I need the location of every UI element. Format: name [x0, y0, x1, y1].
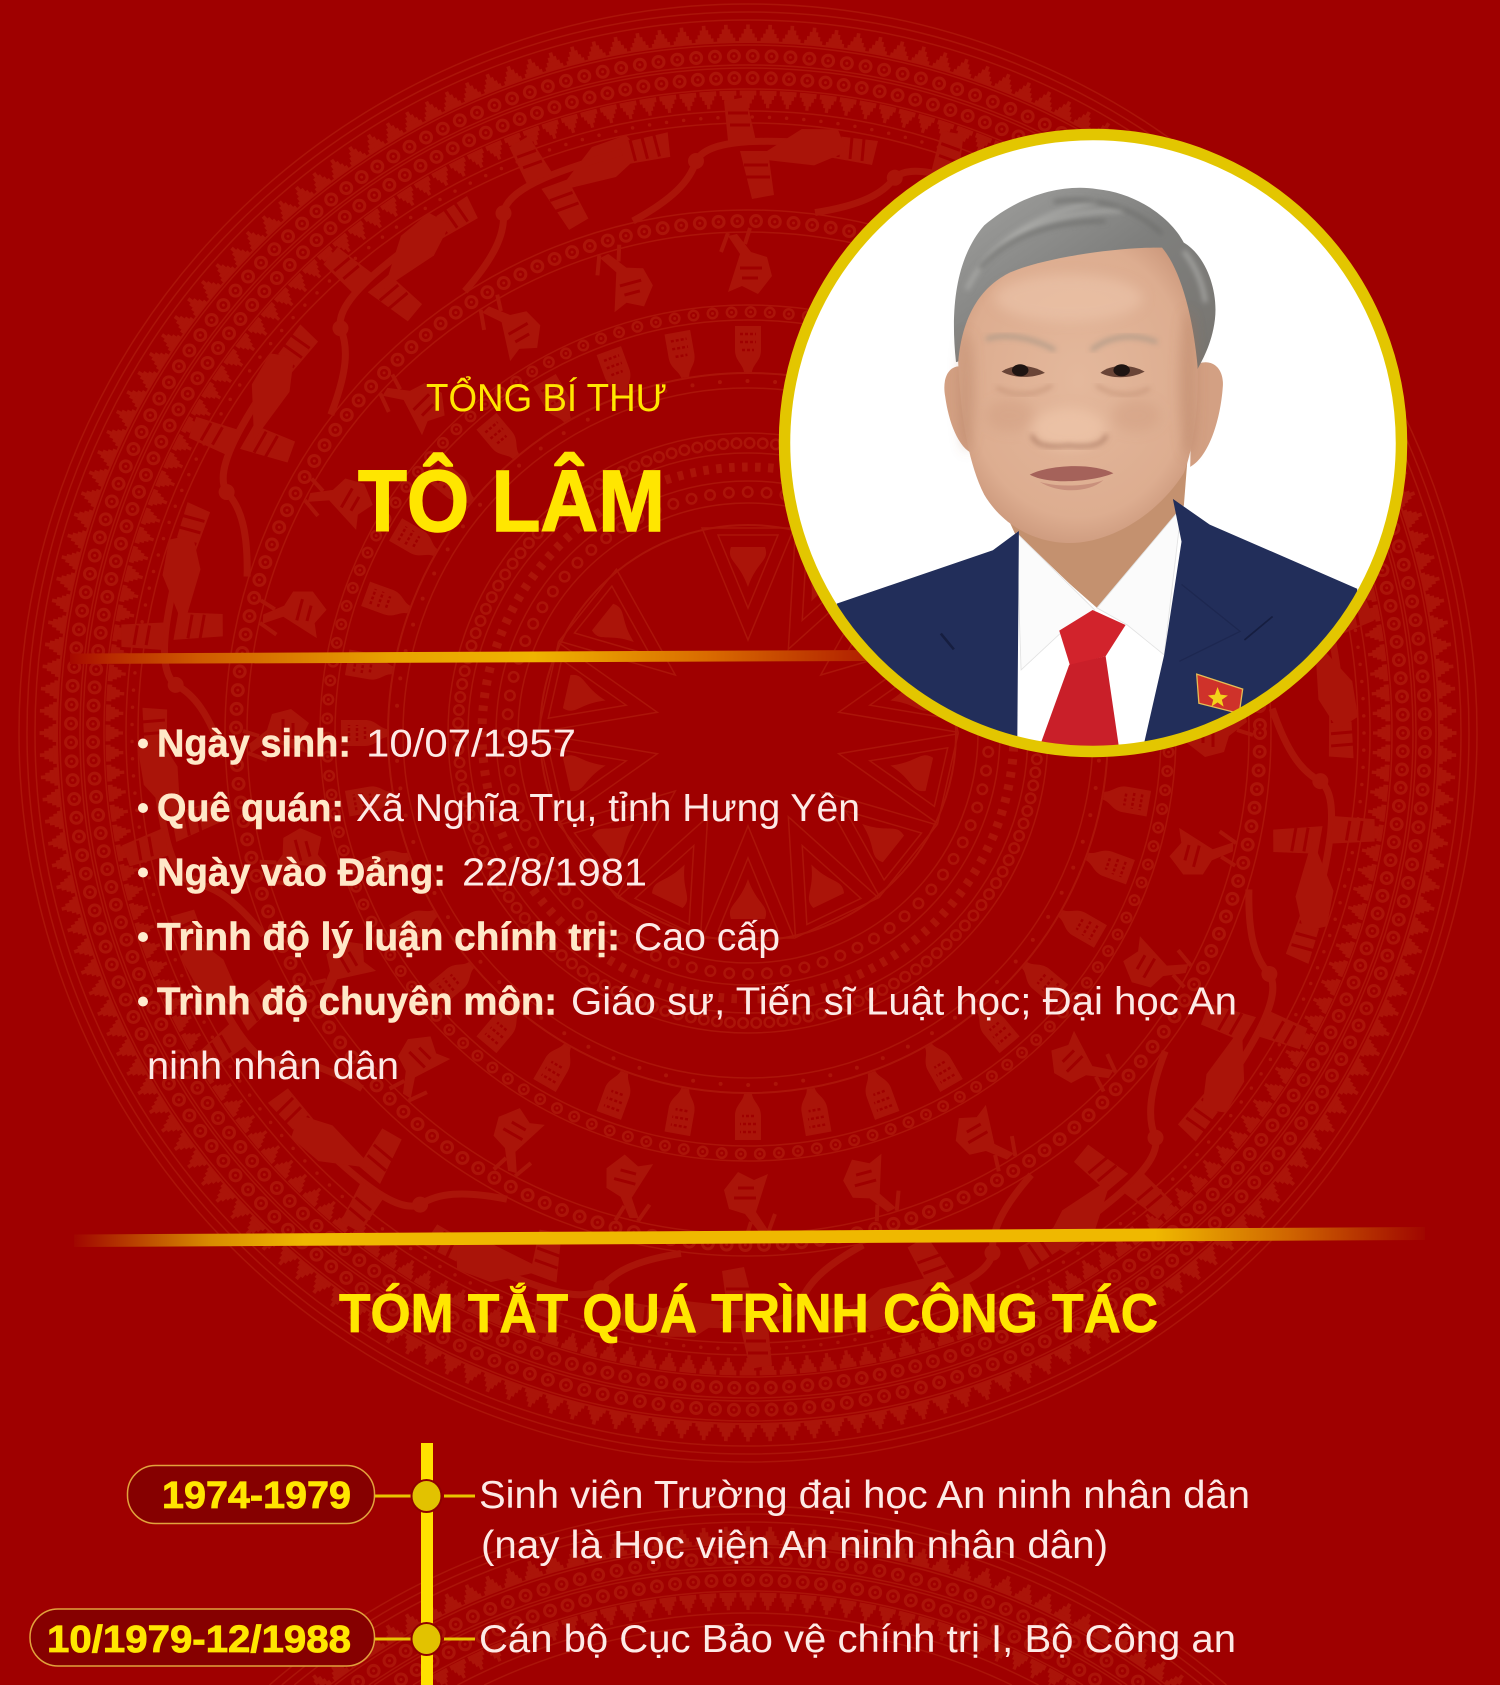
detail: political theory level: Trình độ lý luận chính trị:: [157, 916, 620, 959]
divider: lower gold rule: [74, 1227, 1425, 1247]
detail: professional qualification: Giáo sư, Tiến sĩ Luật học; Đại học An: [571, 980, 1237, 1024]
detail: hometown: [138, 787, 860, 830]
detail: professional qualification: Trình độ chuyên môn:: [157, 980, 557, 1024]
detail: date of birth: 10/07/1957: [366, 722, 576, 766]
portrait: facial shading: [960, 275, 1196, 456]
detail: date of birth: Ngày sinh:: [157, 722, 351, 766]
timeline entry: 1974-1979: (nay là Học viện An ninh nhân dân): [481, 1524, 1108, 1567]
portrait: face: [958, 248, 1198, 543]
portrait: gold ring: [784, 134, 1402, 752]
portrait: suit jacket: [837, 499, 1357, 760]
portrait: mouth: [1030, 466, 1113, 490]
detail: party admission: [138, 852, 647, 894]
title: name: TÔ LÂM: [358, 453, 665, 550]
portrait: neck: [1010, 462, 1188, 608]
detail: professional qualification: [138, 980, 1237, 1088]
timeline entry: 1974-1979: 1974-1979: [162, 1475, 351, 1517]
portrait: hair: [954, 188, 1215, 371]
timeline entry: 1974-1979: [128, 1466, 1250, 1567]
detail: hometown: Quê quán:: [157, 787, 344, 830]
portrait: nose: [1032, 435, 1107, 446]
detail: political theory level: Cao cấp: [634, 916, 780, 959]
portrait: ears: [944, 362, 1223, 467]
portrait: lapel badge: [1197, 674, 1243, 713]
timeline entry: 1974-1979: Sinh viên Trường đại học An ninh nhân dân: [479, 1474, 1250, 1517]
detail: hometown: Xã Nghĩa Trụ, tỉnh Hưng Yên: [356, 787, 860, 830]
timeline entry: 10/1979-12/1988: Cán bộ Cục Bảo vệ chính trị I, Bộ Công an: [479, 1618, 1236, 1661]
timeline entry: 10/1979-12/1988: 10/1979-12/1988: [47, 1619, 351, 1661]
portrait: eyes: [1002, 364, 1145, 377]
heading: career summary: TÓM TẮT QUÁ TRÌNH CÔNG TÁC: [339, 1282, 1158, 1344]
timeline: vertical bar: [421, 1443, 433, 1685]
portrait: red tie: [1038, 610, 1126, 751]
detail: professional qualification: ninh nhân dân: [147, 1045, 399, 1088]
divider: upper gold rule: [70, 650, 875, 664]
timeline: [30, 1443, 1250, 1685]
timeline entry: 10/1979-12/1988: [30, 1609, 1236, 1666]
portrait: shirt collar: [1016, 506, 1184, 671]
background: lower bronze drum pattern: [270, 1506, 1226, 1685]
portrait: eyebrows and lids: [988, 336, 1156, 394]
portrait: leader photo in gold ring: [784, 134, 1402, 760]
title: role: TỔNG BÍ THƯ: [426, 375, 667, 420]
detail: party admission: 22/8/1981: [462, 852, 647, 894]
detail: date of birth: [138, 722, 576, 766]
detail: party admission: Ngày vào Đảng:: [157, 852, 446, 894]
personal details list: [138, 722, 1237, 1088]
